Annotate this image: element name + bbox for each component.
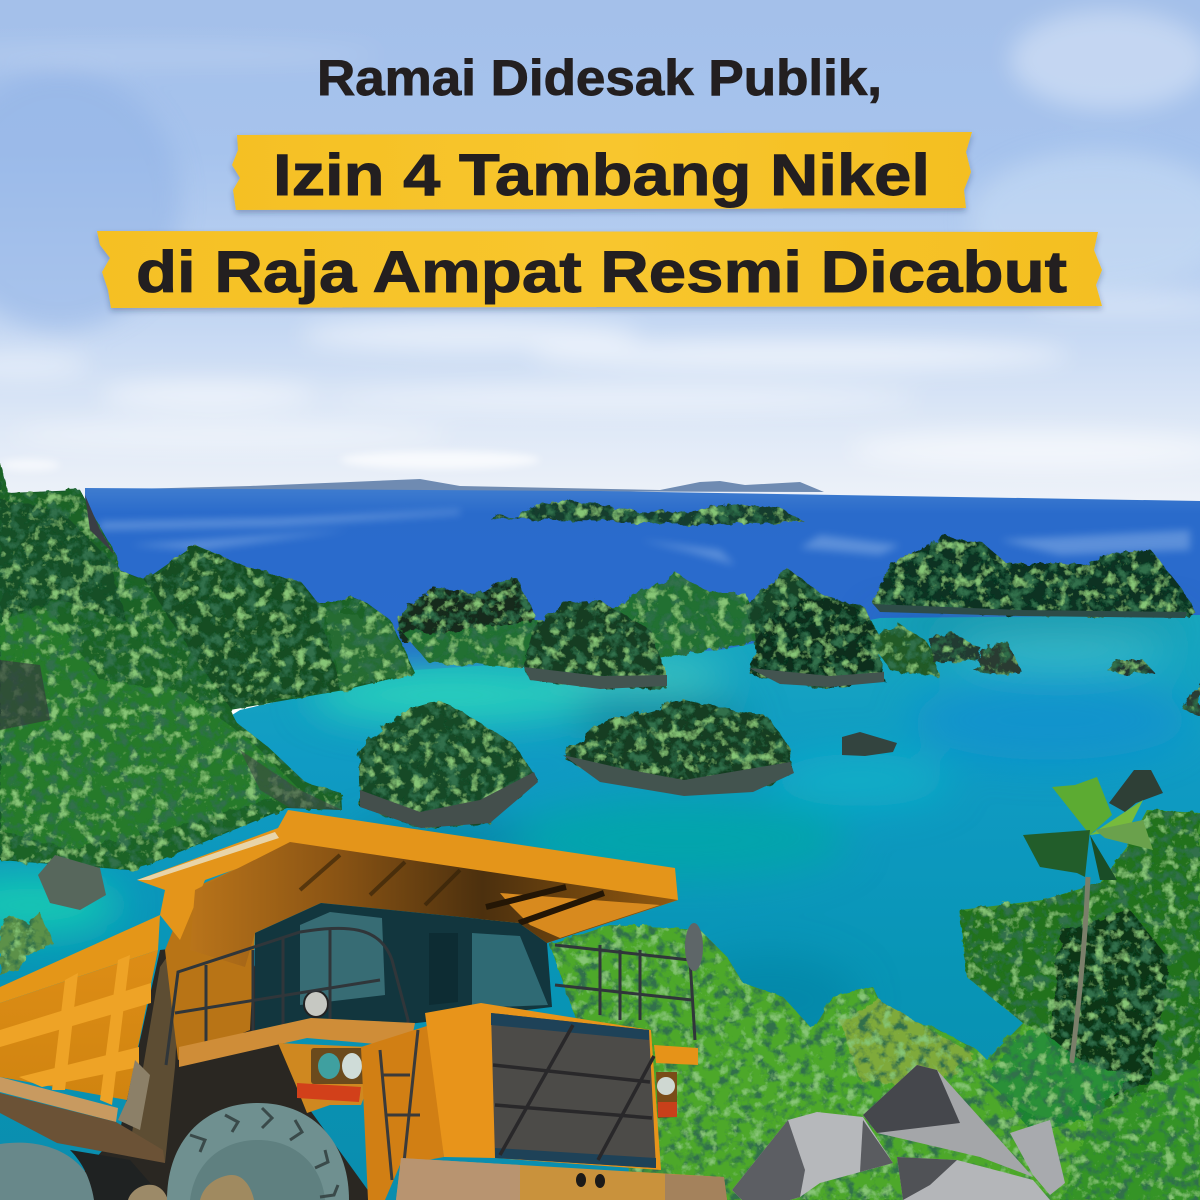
- background: open sea: [85, 488, 1200, 700]
- tape: second title line: [97, 231, 1102, 308]
- truck: radiator grille: [491, 1013, 656, 1168]
- islands: left forest headland: [0, 463, 415, 870]
- nickel ore rocks: [732, 1065, 1065, 1200]
- islands: foreground middle islet: [563, 700, 794, 796]
- sea: wave streaks: [100, 510, 1190, 565]
- palm tree: [1023, 777, 1153, 1077]
- truck: canopy top: [137, 810, 678, 943]
- truck: rusty side wall and dark undercarriage: [60, 940, 375, 1200]
- truck: cab: [255, 903, 552, 1040]
- heading: highlighted line one: Izin 4 Tambang Nikel: [273, 143, 930, 208]
- truck: ladder panel: [361, 1025, 444, 1200]
- truck: right deck and light: [654, 1045, 698, 1065]
- truck: lower body beam and ribs: [0, 1077, 118, 1122]
- truck: railing: [166, 928, 695, 1170]
- truck: canopy left lip: [137, 832, 279, 880]
- heading: first line: Ramai Didesak Publik,: [317, 50, 882, 106]
- islands: right large island: [872, 537, 1195, 618]
- islands: small rock: [842, 732, 897, 756]
- truck: body inner front wall: [165, 860, 300, 1060]
- truck: headlight column: [278, 1043, 368, 1113]
- islands: foreground left islet: [358, 700, 538, 828]
- truck: bumper: [396, 1158, 727, 1200]
- background: distant horizon islands: [90, 479, 824, 492]
- truck: radiator housing: [425, 1003, 661, 1170]
- background: sky: [0, 0, 1200, 505]
- truck: dump body side: [0, 950, 158, 1100]
- ore: left rock: [732, 1112, 893, 1200]
- dump truck: [0, 810, 727, 1200]
- heading: highlighted line two: di Raja Ampat Resmi Dicabut: [136, 240, 1067, 305]
- truck: rear wheels: [0, 1143, 168, 1200]
- truck: headlights: [311, 1048, 367, 1084]
- truck: canopy underside: [190, 842, 678, 967]
- ore: bottom rock: [897, 1157, 1050, 1200]
- tape: first title line: [232, 132, 972, 210]
- truck: front wheel: [167, 1103, 349, 1200]
- ore: top rock: [863, 1065, 1033, 1177]
- ore: right rock: [1010, 1120, 1065, 1195]
- islands: small rock at left shore: [38, 855, 106, 910]
- background: turquoise lagoon: [0, 615, 1200, 1200]
- islands: far island group: [490, 501, 805, 526]
- foreground: small tree at far left: [0, 910, 55, 975]
- islands: rock near palm: [1109, 770, 1163, 812]
- truck: deck: [179, 1018, 415, 1067]
- foreground: jungle right: [550, 810, 1200, 1200]
- foreground palm: [985, 1025, 1133, 1125]
- truck: red reflector: [297, 1083, 361, 1102]
- islands: mid-ground group: [398, 568, 1200, 716]
- lagoon highlights: [0, 617, 1190, 1045]
- truck: mirror: [685, 923, 703, 971]
- islands: rock bases of mid-ground group: [524, 667, 884, 689]
